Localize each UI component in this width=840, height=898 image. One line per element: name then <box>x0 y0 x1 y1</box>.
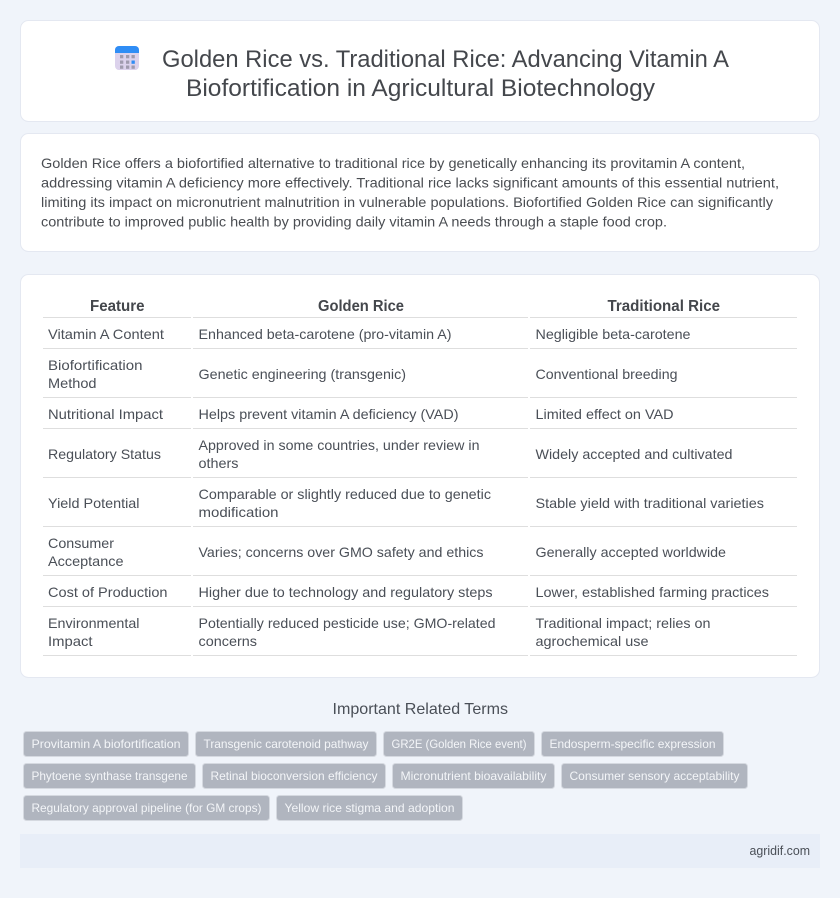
tag <box>384 732 534 756</box>
table row: environmental impact: Traditional impact; relies on <box>536 615 710 631</box>
tag: Regulatory approval pipeline (for GM crops) <box>32 801 262 815</box>
table row: nutritional impact <box>48 406 674 422</box>
tag <box>202 764 386 788</box>
table row: consumer acceptance <box>48 535 726 569</box>
footer <box>20 834 820 868</box>
tag <box>24 764 196 788</box>
text block: introduction paragraph: limiting its impact on micronutrient malnutrition in vulnerable populations. Biofortified Golden Rice can significantly <box>41 194 773 210</box>
tag <box>542 732 724 756</box>
tag <box>24 796 270 820</box>
table row: vitamin A content: Vitamin A Content <box>48 326 164 342</box>
table row: environmental impact: Potentially reduced pesticide use; GMO-related <box>198 615 496 631</box>
table row: yield potential: Stable yield with traditional varieties <box>536 495 764 511</box>
table row: consumer acceptance: Varies; concerns over GMO safety and ethics <box>198 544 484 560</box>
table row: biofortification method: Genetic engineering (transgenic) <box>198 366 406 382</box>
footer: agridif.com <box>750 843 810 858</box>
tag <box>392 764 554 788</box>
table row: biofortification method: Conventional breeding <box>536 366 678 382</box>
table row: biofortification method: Biofortification <box>48 357 142 373</box>
table row: environmental impact: concerns <box>198 633 257 649</box>
table row: biofortification method <box>48 357 678 391</box>
tag: Micronutrient bioavailability <box>400 769 546 783</box>
table row: cost of production: Higher due to technology and regulatory steps <box>198 584 492 600</box>
text block: introduction paragraph <box>41 155 779 230</box>
table row: consumer acceptance: Acceptance <box>48 553 124 569</box>
table header row: Feature <box>90 298 145 315</box>
table row: yield potential: modification <box>198 504 278 520</box>
tag: GR2E (Golden Rice event) <box>392 737 526 751</box>
table row: nutritional impact: Nutritional Impact <box>48 406 163 422</box>
tag <box>24 732 188 756</box>
table row: consumer acceptance: Generally accepted worldwide <box>536 544 726 560</box>
table row: yield potential <box>48 486 764 520</box>
title: Biofortification in Agricultural Biotechnology <box>186 75 655 102</box>
tag: Endosperm-specific expression <box>550 737 716 751</box>
panel: introduction <box>20 134 820 252</box>
table row: cost of production <box>48 584 769 600</box>
table row: vitamin A content <box>48 326 691 342</box>
tag: Transgenic carotenoid pathway <box>204 737 368 751</box>
icon: calendar <box>115 46 139 70</box>
table row: environmental impact: agrochemical use <box>536 633 649 649</box>
table header row <box>90 298 720 315</box>
text block: introduction paragraph: Golden Rice offers a biofortified alternative to traditional rice by genetically enhancing its provitamin A content, <box>41 155 745 171</box>
table row: environmental impact: Environmental <box>48 615 140 631</box>
panel: header <box>20 20 820 122</box>
table row: nutritional impact: Limited effect on VAD <box>536 406 674 422</box>
table row: environmental impact <box>48 615 710 649</box>
panel: comparison table <box>20 274 820 678</box>
tag <box>562 764 748 788</box>
text block: introduction paragraph: addressing vitamin A deficiency more effectively. Traditional rice lacks significant amounts of this essential nutrient, <box>41 174 779 190</box>
table row: yield potential: Comparable or slightly reduced due to genetic <box>198 486 491 502</box>
table header row: Golden Rice <box>318 298 404 315</box>
table row: regulatory status: others <box>198 455 238 471</box>
heading: important related terms: Important Related Terms <box>332 701 508 718</box>
text block: introduction paragraph: contribute to improved public health by providing daily vitamin A needs through a staple food crop. <box>41 214 667 230</box>
table row: cost of production: Cost of Production <box>48 584 168 600</box>
table row: consumer acceptance: Consumer <box>48 535 114 551</box>
tag: Consumer sensory acceptability <box>570 769 740 783</box>
table row: regulatory status: Widely accepted and cultivated <box>536 446 732 462</box>
table row: yield potential: Yield Potential <box>48 495 140 511</box>
tag: Retinal bioconversion efficiency <box>210 769 378 783</box>
tag: Phytoene synthase transgene <box>32 769 188 783</box>
table row: cost of production: Lower, established farming practices <box>536 584 769 600</box>
table row: regulatory status: Approved in some countries, under review in <box>198 437 480 453</box>
table row: biofortification method: Method <box>48 375 96 391</box>
table row: regulatory status <box>48 437 732 471</box>
table row: nutritional impact: Helps prevent vitamin A deficiency (VAD) <box>198 406 458 422</box>
title: Golden Rice vs. Traditional Rice: Advancing Vitamin A <box>162 46 729 73</box>
tag: Provitamin A biofortification <box>32 737 181 751</box>
table row: environmental impact: Impact <box>48 633 93 649</box>
table header row: Traditional Rice <box>608 298 720 315</box>
panel: related term tags <box>24 732 748 820</box>
tag: Yellow rice stigma and adoption <box>284 801 454 815</box>
table row: regulatory status: Regulatory Status <box>48 446 161 462</box>
tag <box>276 796 462 820</box>
table row: vitamin A content: Enhanced beta-carotene (pro-vitamin A) <box>198 326 452 342</box>
table row: vitamin A content: Negligible beta-carotene <box>536 326 691 342</box>
tag <box>196 732 376 756</box>
title <box>162 46 729 102</box>
